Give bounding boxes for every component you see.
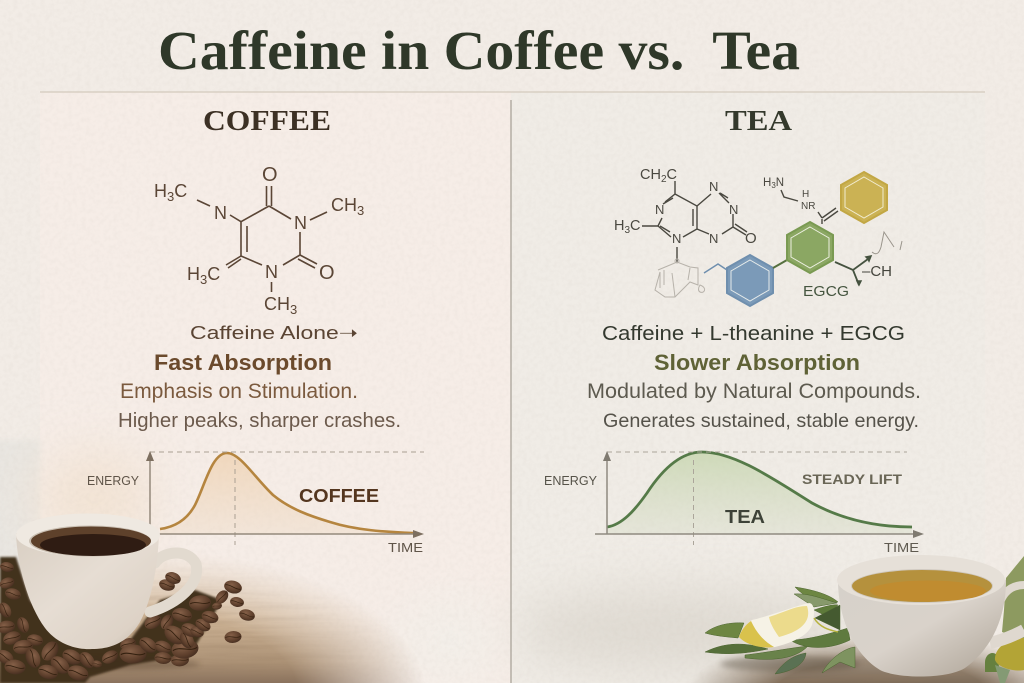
- lemon pieces: [995, 638, 1024, 671]
- coffee caffeine molecule: 3: [357, 203, 364, 218]
- stone table: tea: [694, 635, 1024, 683]
- caffeine fused rings: N: [655, 202, 664, 217]
- tea energy chart: TIME: [884, 540, 919, 555]
- coffee caffeine molecule: 3: [200, 272, 207, 287]
- panel: tea: [544, 105, 924, 555]
- caffeine fused rings: O: [745, 230, 757, 247]
- coffee energy chart: COFFEE: [299, 486, 379, 506]
- faded sugar fragment: [655, 259, 705, 297]
- green hexagon: [773, 222, 833, 273]
- panel: coffee: [87, 105, 424, 555]
- caffeine fused rings: N: [776, 177, 784, 189]
- coffee text block: Emphasis on Stimulation.: [120, 380, 358, 403]
- caffeine fused rings: 3: [624, 225, 630, 236]
- coffee caffeine molecule: O: [262, 164, 278, 186]
- caffeine fused rings: H: [802, 189, 809, 200]
- coffee caffeine molecule: O: [319, 262, 335, 284]
- coffee caffeine molecule: N: [214, 203, 227, 223]
- caffeine fused rings: H: [614, 218, 624, 234]
- coffee caffeine molecule: 3: [167, 189, 174, 204]
- caffeine fused rings: N: [709, 231, 718, 246]
- tea text block: Generates sustained, stable energy.: [603, 410, 919, 432]
- coffee caffeine molecule: CH: [264, 294, 290, 314]
- coffee caffeine molecule: CH: [331, 195, 357, 215]
- tea compounds molecule: [614, 167, 902, 306]
- right side groups: –CH: [862, 263, 892, 280]
- coffee energy chart: [87, 451, 424, 555]
- coffee beans: [0, 557, 256, 683]
- tea cup: [837, 555, 1024, 676]
- caffeine fused rings: CH: [640, 167, 661, 183]
- coffee caffeine molecule: 3: [290, 302, 297, 317]
- right side groups: [803, 232, 902, 300]
- coffee caffeine molecule: N: [294, 213, 307, 233]
- caffeine fused rings: [614, 167, 838, 262]
- yellow hexagon: [841, 172, 887, 223]
- blue hexagon: [704, 255, 773, 306]
- coffee cup: [16, 514, 197, 649]
- coffee text block: Higher peaks, sharper crashes.: [118, 410, 401, 432]
- coffee caffeine molecule: C: [174, 181, 187, 201]
- coffee text block: Fast Absorption: [154, 350, 332, 375]
- tea text block: Modulated by Natural Compounds.: [587, 380, 921, 403]
- right side groups: EGCG: [803, 284, 849, 300]
- tea energy chart: ENERGY: [544, 473, 597, 488]
- coffee energy chart: TIME: [388, 540, 423, 555]
- title: Caffeine in Coffee vs. Tea: [158, 20, 800, 81]
- coffee caffeine molecule: H: [154, 181, 167, 201]
- coffee caffeine molecule: [154, 164, 364, 317]
- tea energy chart: STEADY LIFT: [802, 471, 902, 487]
- coffee caffeine molecule: N: [265, 262, 278, 282]
- coffee text block: [118, 322, 401, 432]
- caffeine fused rings: C: [630, 218, 641, 234]
- tea herbs and lemon: [705, 556, 1024, 683]
- caffeine fused rings: NR: [801, 201, 815, 212]
- caffeine fused rings: N: [709, 179, 718, 194]
- tea energy chart: [544, 451, 924, 555]
- coffee text block: Caffeine Alone➝: [190, 322, 358, 343]
- caffeine fused rings: C: [667, 167, 677, 183]
- caffeine fused rings: 3: [771, 181, 776, 190]
- tea energy chart: TEA: [725, 507, 765, 527]
- coffee caffeine molecule: H: [187, 264, 200, 284]
- tea heading: TEA: [725, 105, 792, 137]
- caffeine fused rings: H: [763, 177, 771, 189]
- caffeine fused rings: 2: [661, 174, 667, 185]
- caffeine fused rings: N: [672, 231, 681, 246]
- tea text block: Slower Absorption: [654, 350, 860, 375]
- tea text block: Caffeine + L-theanine + EGCG: [602, 323, 905, 345]
- coffee caffeine molecule: C: [207, 264, 220, 284]
- caffeine fused rings: N: [729, 202, 738, 217]
- panel frame and divider: [40, 92, 985, 683]
- wood table: coffee: [0, 562, 418, 683]
- coffee energy chart: ENERGY: [87, 473, 139, 488]
- tea text block: [587, 323, 921, 432]
- coffee heading: COFFEE: [203, 105, 331, 137]
